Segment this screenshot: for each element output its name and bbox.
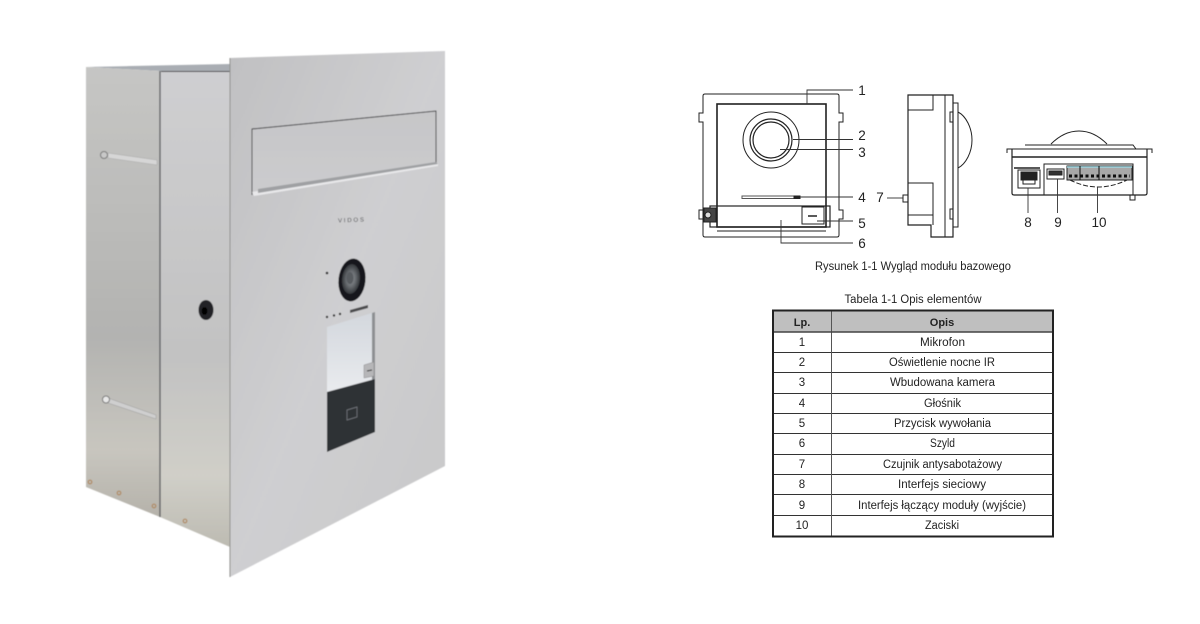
- upper hinge bar: [100, 152, 157, 165]
- camera lens: [336, 257, 368, 303]
- clips: [950, 112, 953, 122]
- table grid: [773, 310, 1053, 537]
- callout numbers: 9: [1054, 215, 1062, 230]
- table rows: 7: [799, 459, 805, 471]
- leader lines: [780, 90, 903, 243]
- table rows: Oświetlenie nocne IR: [889, 357, 995, 369]
- callout numbers: [858, 83, 1107, 251]
- product photo: stainless steel mailbox with intercom: [86, 51, 445, 577]
- call button: [802, 207, 824, 224]
- network port: [1014, 168, 1040, 188]
- left housing panel: [86, 67, 160, 517]
- body outline: [908, 95, 953, 237]
- faceplate: [717, 104, 826, 227]
- name plate window: [327, 312, 375, 392]
- table rows: Wbudowana kamera: [890, 377, 996, 389]
- table header: Lp.: [794, 317, 810, 329]
- card reader panel: [327, 379, 375, 452]
- call button: [364, 362, 374, 378]
- callout numbers: 4: [858, 190, 866, 205]
- table rows: Mikrofon: [920, 337, 965, 349]
- table title: Tabela 1-1 Opis elementów: [844, 294, 982, 306]
- front plate: [230, 51, 445, 577]
- top plate: [1025, 145, 1136, 149]
- dome: [1051, 131, 1107, 144]
- table rows: 1: [799, 337, 805, 349]
- table rows: Zaciski: [925, 520, 959, 532]
- table rows: 9: [799, 500, 805, 512]
- table rows: Interfejs łączący moduły (wyjście): [858, 500, 1026, 512]
- table rows: Czujnik antysabotażowy: [883, 459, 1002, 471]
- table rows: 3: [799, 377, 805, 389]
- table header: Opis: [930, 317, 954, 329]
- table rows: 4: [799, 398, 806, 410]
- side lock grommet: [198, 300, 214, 320]
- brand logo: VIDOS: [338, 218, 364, 224]
- name plate bar: [710, 206, 830, 227]
- callout numbers: 2: [858, 128, 866, 143]
- table rows: 10: [796, 520, 808, 532]
- camera rings: [743, 112, 799, 168]
- terminal block: [1044, 164, 1133, 195]
- front plate: [953, 103, 958, 227]
- table rows: 2: [799, 357, 805, 369]
- side view line drawing: [903, 95, 972, 237]
- rear / bottom view line drawing: [1007, 131, 1152, 213]
- speaker slit: [742, 196, 800, 198]
- callout numbers: 3: [858, 145, 866, 160]
- indicator LEDs: [326, 313, 341, 318]
- leader lines: [1028, 179, 1098, 213]
- table rows: Głośnik: [924, 398, 961, 410]
- tamper sensor: [903, 195, 908, 202]
- table rows: Szyld: [930, 438, 955, 450]
- mail slot flap: [252, 111, 438, 196]
- screw: [699, 208, 716, 222]
- table rows: Interfejs sieciowy: [898, 479, 986, 491]
- table: list of elements: [773, 310, 1053, 537]
- table rows: Przycisk wywołania: [894, 418, 992, 430]
- lower hinge bar: [102, 396, 156, 419]
- table rows: 8: [799, 479, 805, 491]
- body: [1012, 149, 1147, 195]
- top lid of housing: [86, 64, 230, 72]
- callout numbers: 8: [1024, 215, 1032, 230]
- callout numbers: 7: [876, 190, 884, 205]
- callout numbers: 5: [858, 216, 866, 231]
- front view line drawing: [699, 90, 903, 243]
- callout numbers: 6: [858, 236, 866, 251]
- figure caption: Rysunek 1-1 Wygląd modułu bazowego: [815, 261, 1011, 273]
- bottom rivets: [88, 480, 187, 523]
- table rows: 5: [799, 418, 805, 430]
- outer frame: [699, 94, 843, 237]
- speaker slit: [350, 305, 368, 313]
- callout numbers: 1: [858, 83, 866, 98]
- table rows: 6: [799, 438, 805, 450]
- middle housing panel: [160, 71, 230, 547]
- module connector: [1047, 169, 1064, 179]
- callout numbers: 10: [1091, 215, 1107, 230]
- table header: [773, 311, 1053, 332]
- dome: [958, 112, 972, 168]
- side clip: [1130, 195, 1135, 200]
- table rows: [796, 337, 1026, 532]
- microphone dot: [326, 272, 328, 274]
- dashed bracket: [1070, 180, 1127, 187]
